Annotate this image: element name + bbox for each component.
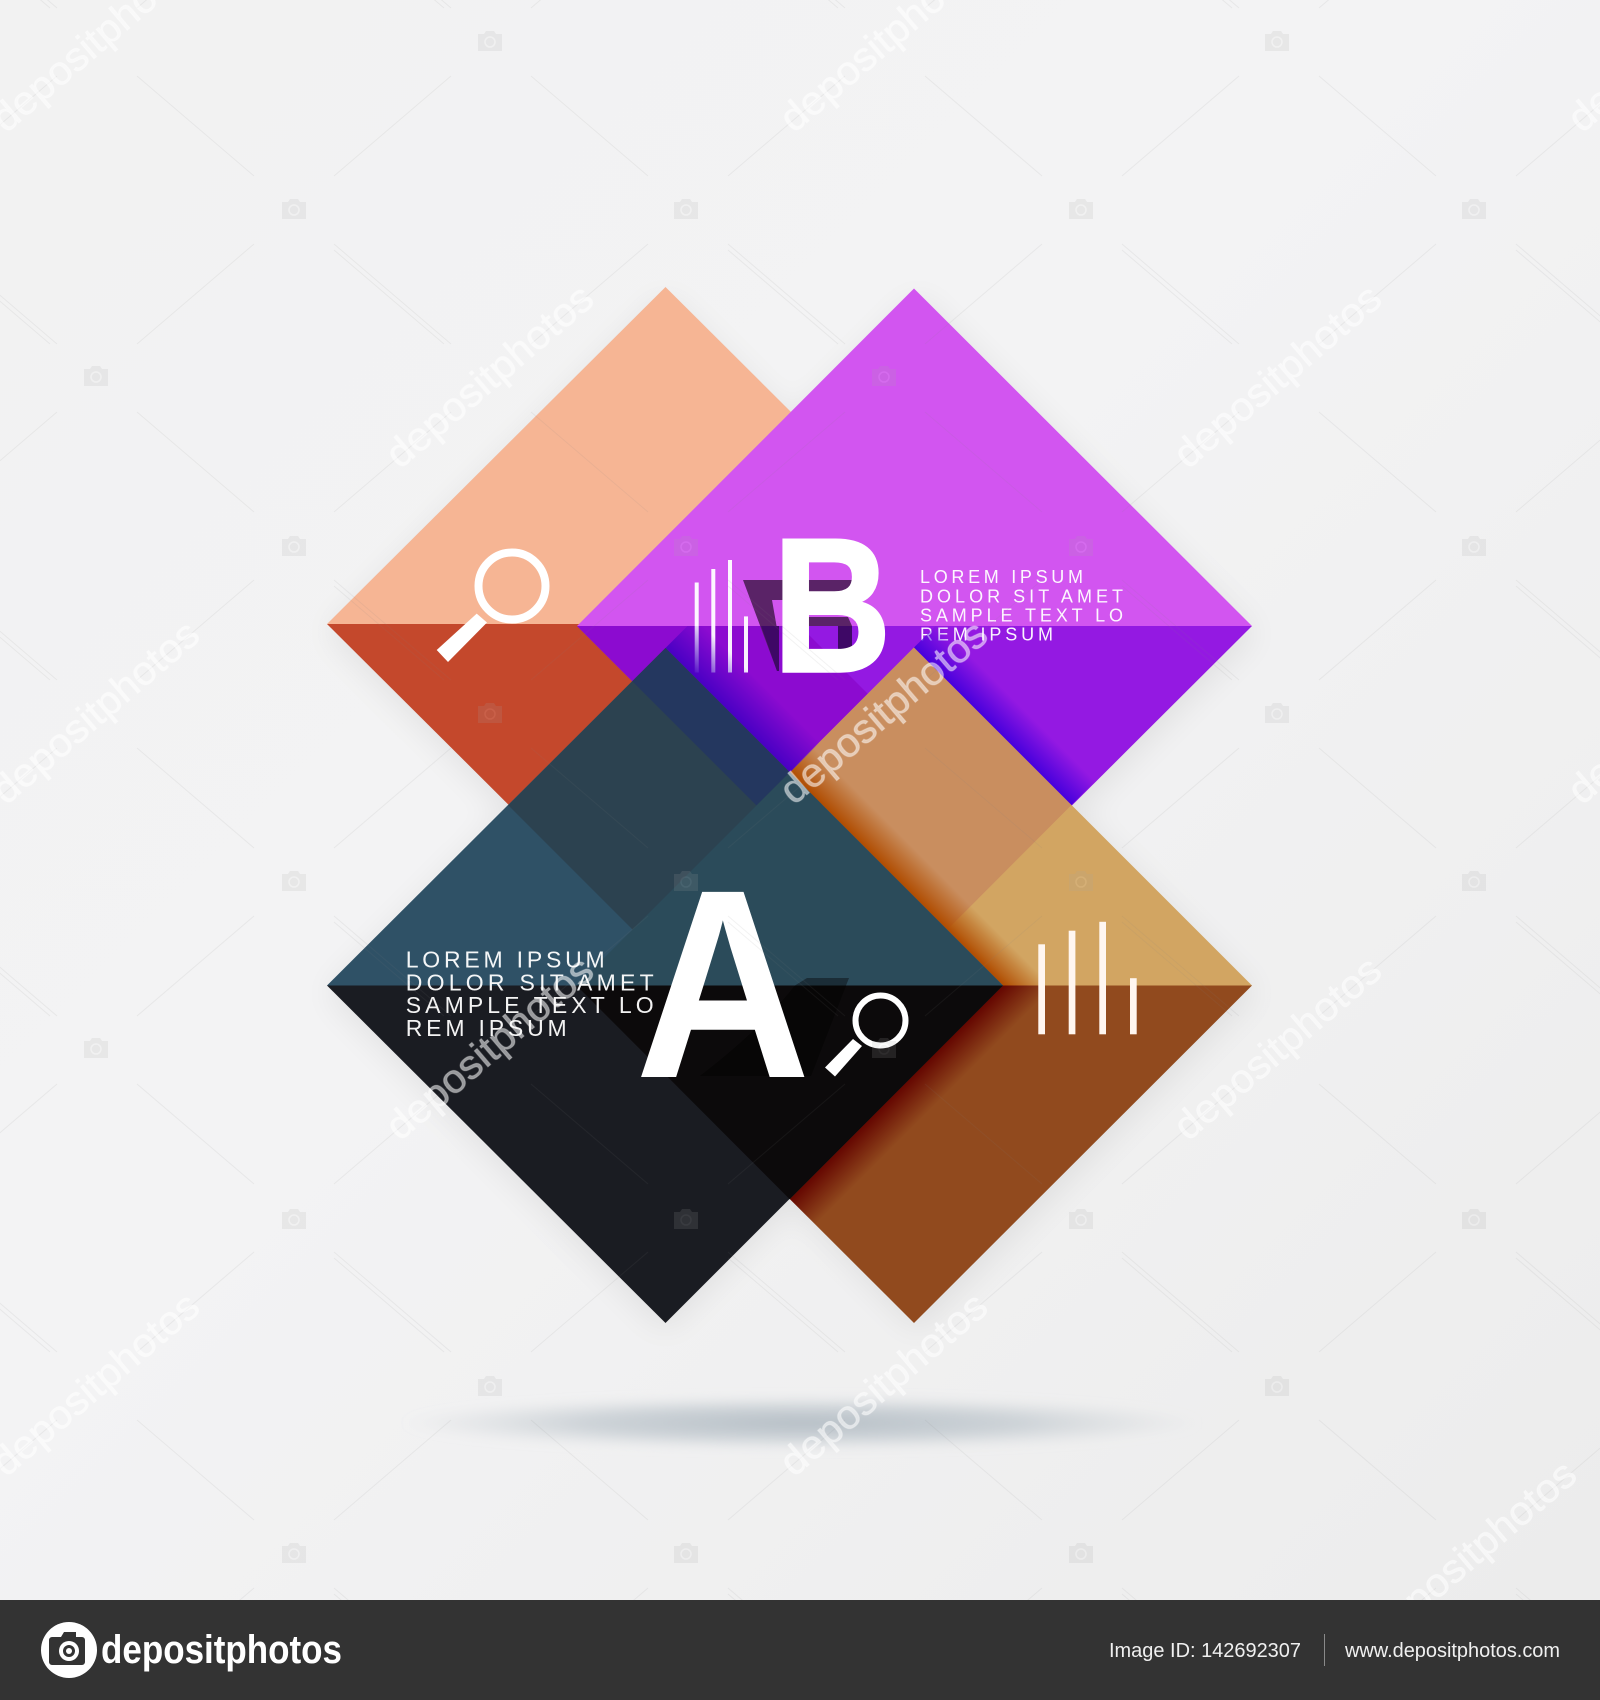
letter A: A bbox=[635, 835, 811, 1135]
letter B: B bbox=[773, 499, 891, 712]
watermark text: depositphotos bbox=[1165, 276, 1390, 477]
footer bar bbox=[0, 1600, 1600, 1700]
diamond soft shadows bbox=[327, 295, 1256, 1331]
text block: lorem ipsum on purple bbox=[920, 567, 1123, 644]
text block: lorem ipsum on dark bbox=[406, 946, 654, 1041]
text block: lorem ipsum on purple: DOLOR SIT AMET bbox=[920, 586, 1123, 606]
shadow of letter B bbox=[743, 580, 855, 671]
watermark text: depositphotos bbox=[377, 276, 602, 477]
text block: lorem ipsum on dark: REM IPSUM bbox=[406, 1015, 567, 1041]
footer image id: Image ID: 142692307 bbox=[1109, 1640, 1301, 1662]
watermark text: depositphotos bbox=[771, 1284, 996, 1485]
shadow bands on brown bbox=[790, 736, 1045, 1240]
footer url: www.depositphotos.com bbox=[1344, 1640, 1560, 1662]
icon: magnifier on peach bbox=[437, 552, 546, 662]
floor shadow bbox=[402, 1396, 1202, 1450]
text block: lorem ipsum on dark: SAMPLE TEXT LO bbox=[406, 992, 654, 1018]
footer separator bbox=[1324, 1634, 1325, 1666]
text block: lorem ipsum on purple: SAMPLE TEXT LO bbox=[920, 606, 1123, 626]
watermark text: depositphotos bbox=[1165, 948, 1390, 1149]
watermark camera icons bbox=[84, 31, 1486, 1563]
text block: lorem ipsum on dark: LOREM IPSUM bbox=[406, 946, 605, 972]
shadow of letter A bbox=[700, 978, 849, 1076]
icon: bar chart on brown bbox=[1038, 922, 1137, 1034]
watermark text: depositphotos bbox=[377, 948, 602, 1149]
footer brand name: depositphotos bbox=[101, 1628, 342, 1672]
panel: brown diamond bbox=[576, 648, 1252, 1323]
icon: magnifier on dark bbox=[825, 996, 906, 1076]
watermark text: depositphotos bbox=[771, 612, 996, 813]
panel: peach diamond bbox=[327, 287, 1004, 961]
icon: bar chart on purple bbox=[695, 560, 748, 672]
icon: footer camera logo bbox=[41, 1622, 97, 1678]
text block: lorem ipsum on dark: DOLOR SIT AMET bbox=[406, 970, 654, 996]
text block: lorem ipsum on purple: LOREM IPSUM bbox=[920, 567, 1083, 587]
watermark text: depositphotos bbox=[1360, 1452, 1585, 1653]
panel: purple diamond bbox=[577, 288, 1252, 963]
shadow bands on purple bbox=[666, 616, 1098, 805]
text block: lorem ipsum on purple: REM IPSUM bbox=[920, 624, 1053, 644]
panel: dark diamond bbox=[327, 648, 1003, 1323]
